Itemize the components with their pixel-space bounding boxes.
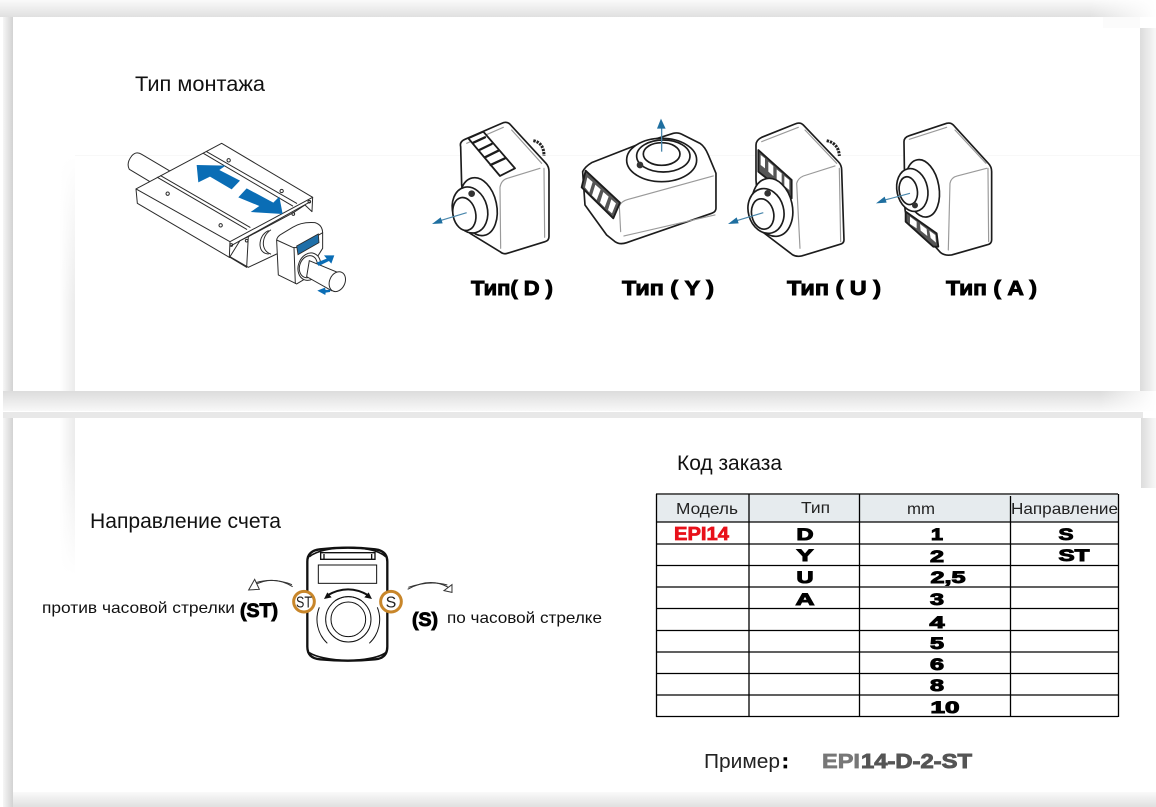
table header: Модель — [676, 501, 738, 518]
icon: encoder type Y — [582, 119, 716, 244]
panel: counting direction and order code — [13, 418, 1146, 792]
example code — [704, 751, 972, 773]
text: clockwise label: (S) — [412, 610, 438, 631]
marker: ST: ST — [296, 594, 313, 611]
table mm column: 8 — [930, 676, 944, 695]
table: order code — [656, 494, 1118, 717]
marker: S: S — [386, 595, 396, 612]
table direction column — [1058, 525, 1090, 565]
table mm column — [930, 525, 966, 717]
table mm column: 6 — [930, 655, 944, 674]
encoder body — [277, 223, 323, 284]
type labels: Тип ( Y ) — [622, 278, 714, 300]
table mm column: 2 — [930, 547, 944, 566]
arrow: D direction — [440, 213, 467, 221]
arrow: shaft rotation down — [317, 288, 331, 295]
table direction column: ST — [1058, 546, 1090, 565]
table header: Направление — [1011, 501, 1118, 518]
table type column: Y — [796, 546, 814, 565]
table type column: D — [796, 525, 814, 544]
icon: encoder type A — [876, 123, 992, 255]
table mm column: 10 — [930, 698, 960, 717]
example code: : — [782, 751, 789, 773]
arrow: A direction — [885, 193, 910, 200]
type labels: Тип ( A ) — [946, 278, 1037, 300]
type labels — [471, 278, 1037, 300]
table mm column: 5 — [930, 634, 944, 653]
example code: EPI — [822, 751, 860, 773]
heading: counting direction: Направление счета — [90, 510, 281, 533]
text: clockwise label — [412, 610, 602, 631]
arrow: linear travel left — [197, 165, 240, 189]
arrow: Y direction — [660, 127, 664, 152]
arrow: counter-clockwise — [249, 579, 293, 590]
example code: Пример — [704, 751, 780, 773]
heading: mounting type: Тип монтажа — [135, 73, 265, 96]
table header — [676, 500, 1118, 518]
table type column: U — [796, 568, 814, 587]
table mm column: 2,5 — [930, 568, 966, 587]
marker: ST — [294, 591, 314, 612]
type labels: Тип ( U ) — [787, 278, 881, 300]
panel: mounting type — [13, 17, 1140, 391]
type labels: Тип( D ) — [471, 278, 553, 300]
arrow: clockwise — [408, 582, 452, 592]
table mm column: 4 — [930, 613, 945, 632]
text: counter-clockwise label: (ST) — [240, 601, 278, 622]
icon: encoder type D — [432, 122, 549, 254]
table mm column: 1 — [931, 525, 943, 544]
table header: mm — [907, 501, 935, 518]
text: counter-clockwise label — [42, 600, 278, 622]
marker: S — [381, 591, 401, 612]
table direction column: S — [1058, 525, 1074, 544]
table mm column: 3 — [930, 590, 944, 609]
arrow: U direction — [737, 213, 763, 221]
arrow: linear travel right — [238, 188, 283, 214]
example code: 14-D-2-ST — [861, 751, 972, 773]
table type column — [796, 525, 814, 609]
table model column: EPI14 — [674, 524, 729, 544]
heading: order code: Код заказа — [677, 452, 782, 475]
arrow: shaft rotation up — [317, 255, 334, 266]
icon: encoder type U — [728, 123, 844, 256]
text: counter-clockwise label: против часовой стрелки — [42, 600, 235, 617]
icon: linear rail with encoder — [128, 143, 349, 295]
table header: Тип — [801, 500, 830, 517]
text: clockwise label: по часовой стрелке — [447, 610, 602, 627]
table type column: A — [796, 590, 814, 609]
icon: encoder front view with ST and S markers — [249, 547, 452, 661]
